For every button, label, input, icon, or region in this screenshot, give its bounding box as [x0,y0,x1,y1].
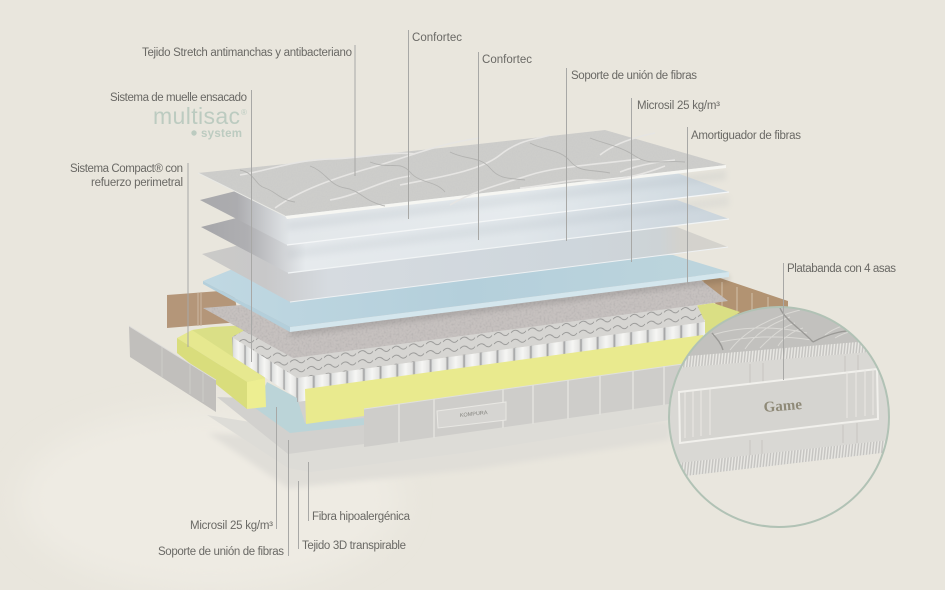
label: Microsil bottom: Microsil 25 kg/m³ [190,520,273,532]
back border fabric: right [688,277,788,330]
exploded mattress [129,130,788,488]
leader: Plataband [782,263,784,380]
yellow foam: back of frame [192,303,740,400]
label: Tejido 3D: Tejido 3D transpirable [302,540,406,552]
label: Confortec 2: Confortec [482,54,532,66]
yellow foam: left bar [177,330,266,409]
side panel front with brand label [364,363,690,447]
bottom fibre layers [207,380,670,488]
logo: multisac system: multisac [153,103,240,129]
logo: multisac system [153,103,247,140]
soft floor glow [20,410,400,590]
logo: multisac system: ® [241,108,247,117]
label: Sistema Compact: Sistema Compact® con [70,163,183,175]
Confortec upper layer [200,170,729,245]
label: Platabanda: Platabanda con 4 asas [787,263,896,275]
label: Amortiguador: Amortiguador de fibras [691,130,801,142]
handle [679,369,878,443]
logo: multisac system: system [201,128,242,140]
back border fabric: left [167,290,240,328]
quilted top fabric [198,130,726,219]
side band [670,348,895,465]
yellow foam: front bar [305,335,710,424]
side panel left [129,326,216,412]
brand label: KOMPURA [460,410,488,419]
label: Soporte de unión de fibras top: Soporte de unión de fibras [571,70,697,82]
band seams [750,355,858,465]
label: muelle ensacado: Sistema de muelle ensacado [110,92,247,104]
brand label [437,402,506,428]
lens outline [669,307,889,527]
upper piping [682,342,866,368]
label: Fibra hipoalergénica: Fibra hipoalergénica [312,511,411,523]
Game logo: Game [763,397,803,416]
quilted top of detail [688,308,858,356]
label: Confortec 1: Confortec [412,32,462,44]
fibre layer: shock absorber [203,270,728,358]
label: Tejido Stretch: Tejido Stretch antimanchas y antibacteriano [142,47,352,59]
fibre join layer [202,227,728,302]
label: Sistema Compact [70,163,183,189]
lower piping [678,440,890,476]
Confortec lower layer [201,196,729,273]
pocket springs [232,290,705,402]
bottom blue foam [255,382,364,433]
blue foam layer: Microsil [203,255,729,336]
label: Sistema Compact: refuerzo perimetral [91,177,183,189]
label: Microsil top: Microsil 25 kg/m³ [637,100,720,112]
leader lines [188,30,688,556]
label: Soporte bottom: Soporte de unión de fibras [158,546,284,558]
detail lens: Game handle [660,300,900,527]
